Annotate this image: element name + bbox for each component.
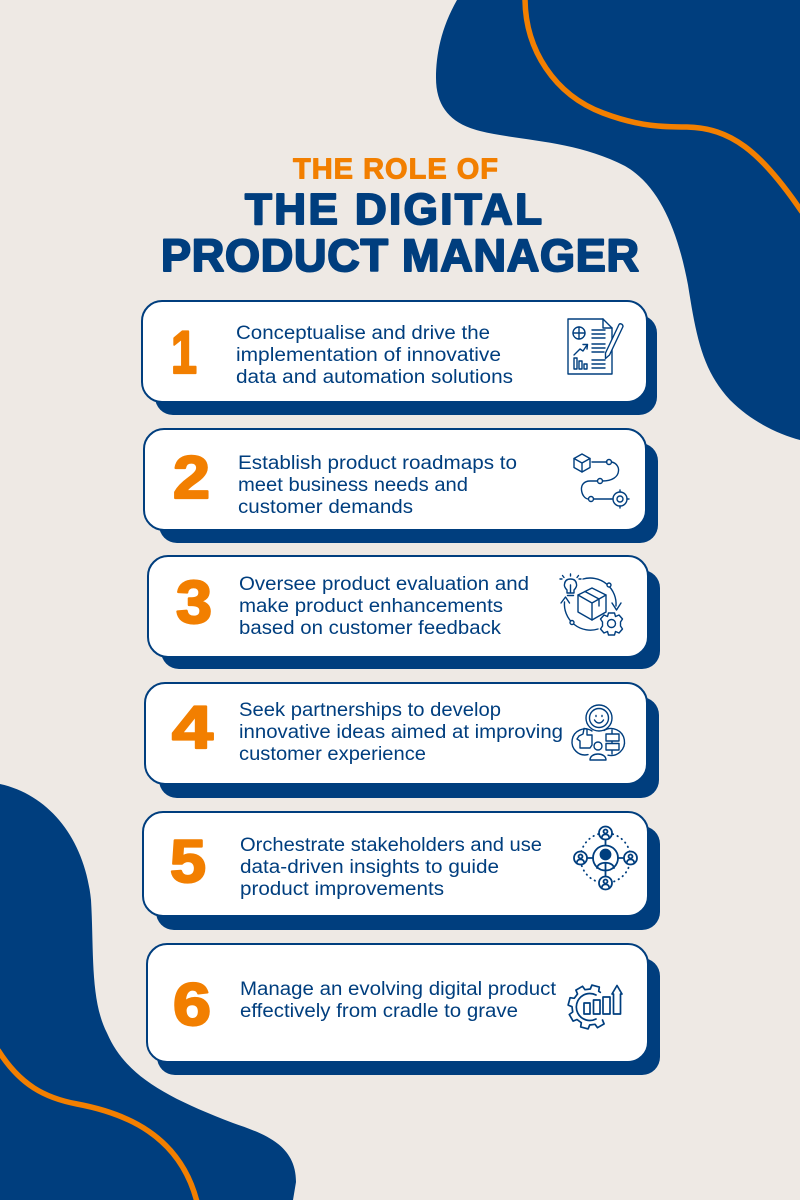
title: PRODUCT MANAGER [161,230,639,281]
blob: top right [436,0,800,440]
number 2: 2 [173,444,210,511]
text: step 5 [240,835,542,900]
icon: product cycle [560,574,622,635]
text: step 4: customer experience [239,744,426,765]
text: step 1: implementation of innovative [236,345,501,366]
number 6: 6 [173,971,211,1038]
text: step 3: make product enhancements [239,596,503,617]
text: step 3: Oversee product evaluation and [239,574,529,595]
panel: step 6 [147,944,660,1075]
title: THE ROLE OF [293,154,498,186]
panel: step 2 [144,429,658,543]
text: step 3 [239,574,529,639]
text: step 2: meet business needs and [238,475,468,496]
text: step 1: Conceptualise and drive the [236,323,490,344]
text: step 5: product improvements [240,879,444,900]
number 3: 3 [176,569,212,636]
text: step 1: data and automation solutions [236,367,513,388]
panel: step 5 [143,812,660,930]
text: step 2: Establish product roadmaps to [238,453,517,474]
text: step 5: Orchestrate stakeholders and use [240,835,542,856]
text: step 5: data-driven insights to guide [240,857,499,878]
text: step 6: effectively from cradle to grave [240,1001,518,1022]
icon: document with pencil [568,319,623,374]
icon: gear with growth chart [568,985,622,1029]
panel: step 1 [142,301,657,415]
text: step 4 [239,700,563,765]
panel: step 4 [145,683,659,798]
icon: customer feedback [572,705,625,760]
text: step 4: Seek partnerships to develop [239,700,501,721]
text: step 3: based on customer feedback [239,618,502,639]
title [161,154,639,281]
number 5: 5 [170,828,206,895]
text: step 6: Manage an evolving digital product [240,979,557,1000]
blob: bottom left [0,784,296,1200]
icon: roadmap [574,454,629,508]
number 4: 4 [172,694,214,761]
panel: step 3 [148,556,660,669]
title: THE DIGITAL [245,185,542,234]
text: step 4: innovative ideas aimed at improving [239,722,563,743]
text: step 2 [238,453,517,518]
text: step 2: customer demands [238,497,413,518]
text: step 1 [236,323,513,388]
icon: stakeholder network [574,826,637,890]
text: step 6 [240,979,557,1022]
number 1: 1 [171,319,197,386]
